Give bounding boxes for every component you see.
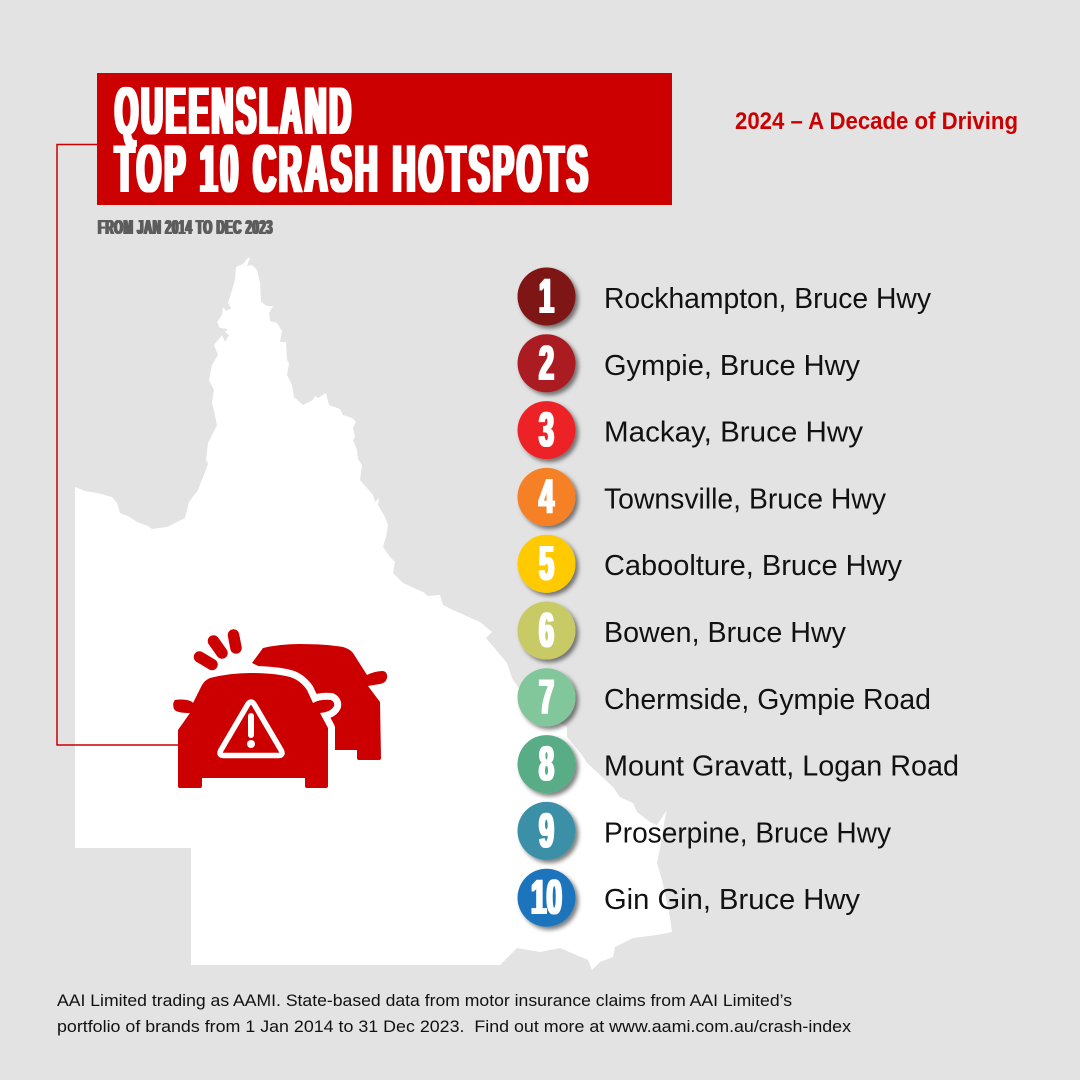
row 2: Gympie, Bruce Hwy [604, 350, 860, 382]
row 10: 10 [531, 872, 562, 925]
row 5 [518, 535, 902, 593]
row 5: Caboolture, Bruce Hwy [604, 550, 902, 582]
connector line [57, 144, 179, 745]
footer note: portfolio of brands from 1 Jan 2014 to 31 Dec 2023. Find out more at www.aami.com.au/crash-index [57, 1018, 852, 1036]
row 4 [518, 468, 886, 526]
row 1: Rockhampton, Bruce Hwy [604, 283, 931, 315]
row 5: 5 [539, 538, 554, 591]
row 3: 3 [539, 404, 554, 457]
row 7 [518, 668, 931, 726]
row 8: 8 [539, 738, 554, 791]
row 4: 4 [539, 471, 554, 524]
icon: crashed cars with warning [173, 635, 387, 788]
report label: 2024 – A Decade of Driving [735, 108, 1018, 135]
row 8 [518, 735, 959, 793]
row 9: 9 [539, 805, 554, 858]
row 7: Chermside, Gympie Road [604, 684, 931, 716]
row 9 [518, 802, 891, 860]
row 8: Mount Gravatt, Logan Road [604, 751, 959, 783]
row 9: Proserpine, Bruce Hwy [604, 817, 891, 849]
row 1 [518, 268, 931, 326]
row 10 [518, 869, 860, 927]
row 2: 2 [539, 337, 554, 390]
row 6: 6 [539, 604, 554, 658]
row 3: Mackay, Bruce Hwy [604, 417, 864, 449]
hotspot list [518, 268, 959, 927]
warning triangle [220, 702, 282, 756]
row 3 [518, 401, 864, 459]
row 10: Gin Gin, Bruce Hwy [604, 884, 860, 916]
row 2 [518, 334, 860, 392]
footer note [57, 992, 852, 1036]
footer note: AAI Limited trading as AAMI. State-based data from motor insurance claims from AAI Limited’s [57, 992, 792, 1010]
row 7: 7 [539, 671, 554, 724]
row 1: 1 [539, 270, 554, 324]
impact sparks [200, 635, 236, 664]
title banner: QUEENSLAND [115, 73, 354, 149]
row 6 [518, 602, 846, 660]
map of Queensland [75, 258, 672, 970]
subtitle date range: FROM JAN 2014 TO DEC 2023 [98, 217, 273, 239]
title banner [97, 73, 672, 207]
rear car [252, 644, 387, 760]
row 6: Bowen, Bruce Hwy [604, 617, 846, 649]
front car [173, 673, 334, 788]
row 4: Townsville, Bruce Hwy [604, 483, 886, 515]
